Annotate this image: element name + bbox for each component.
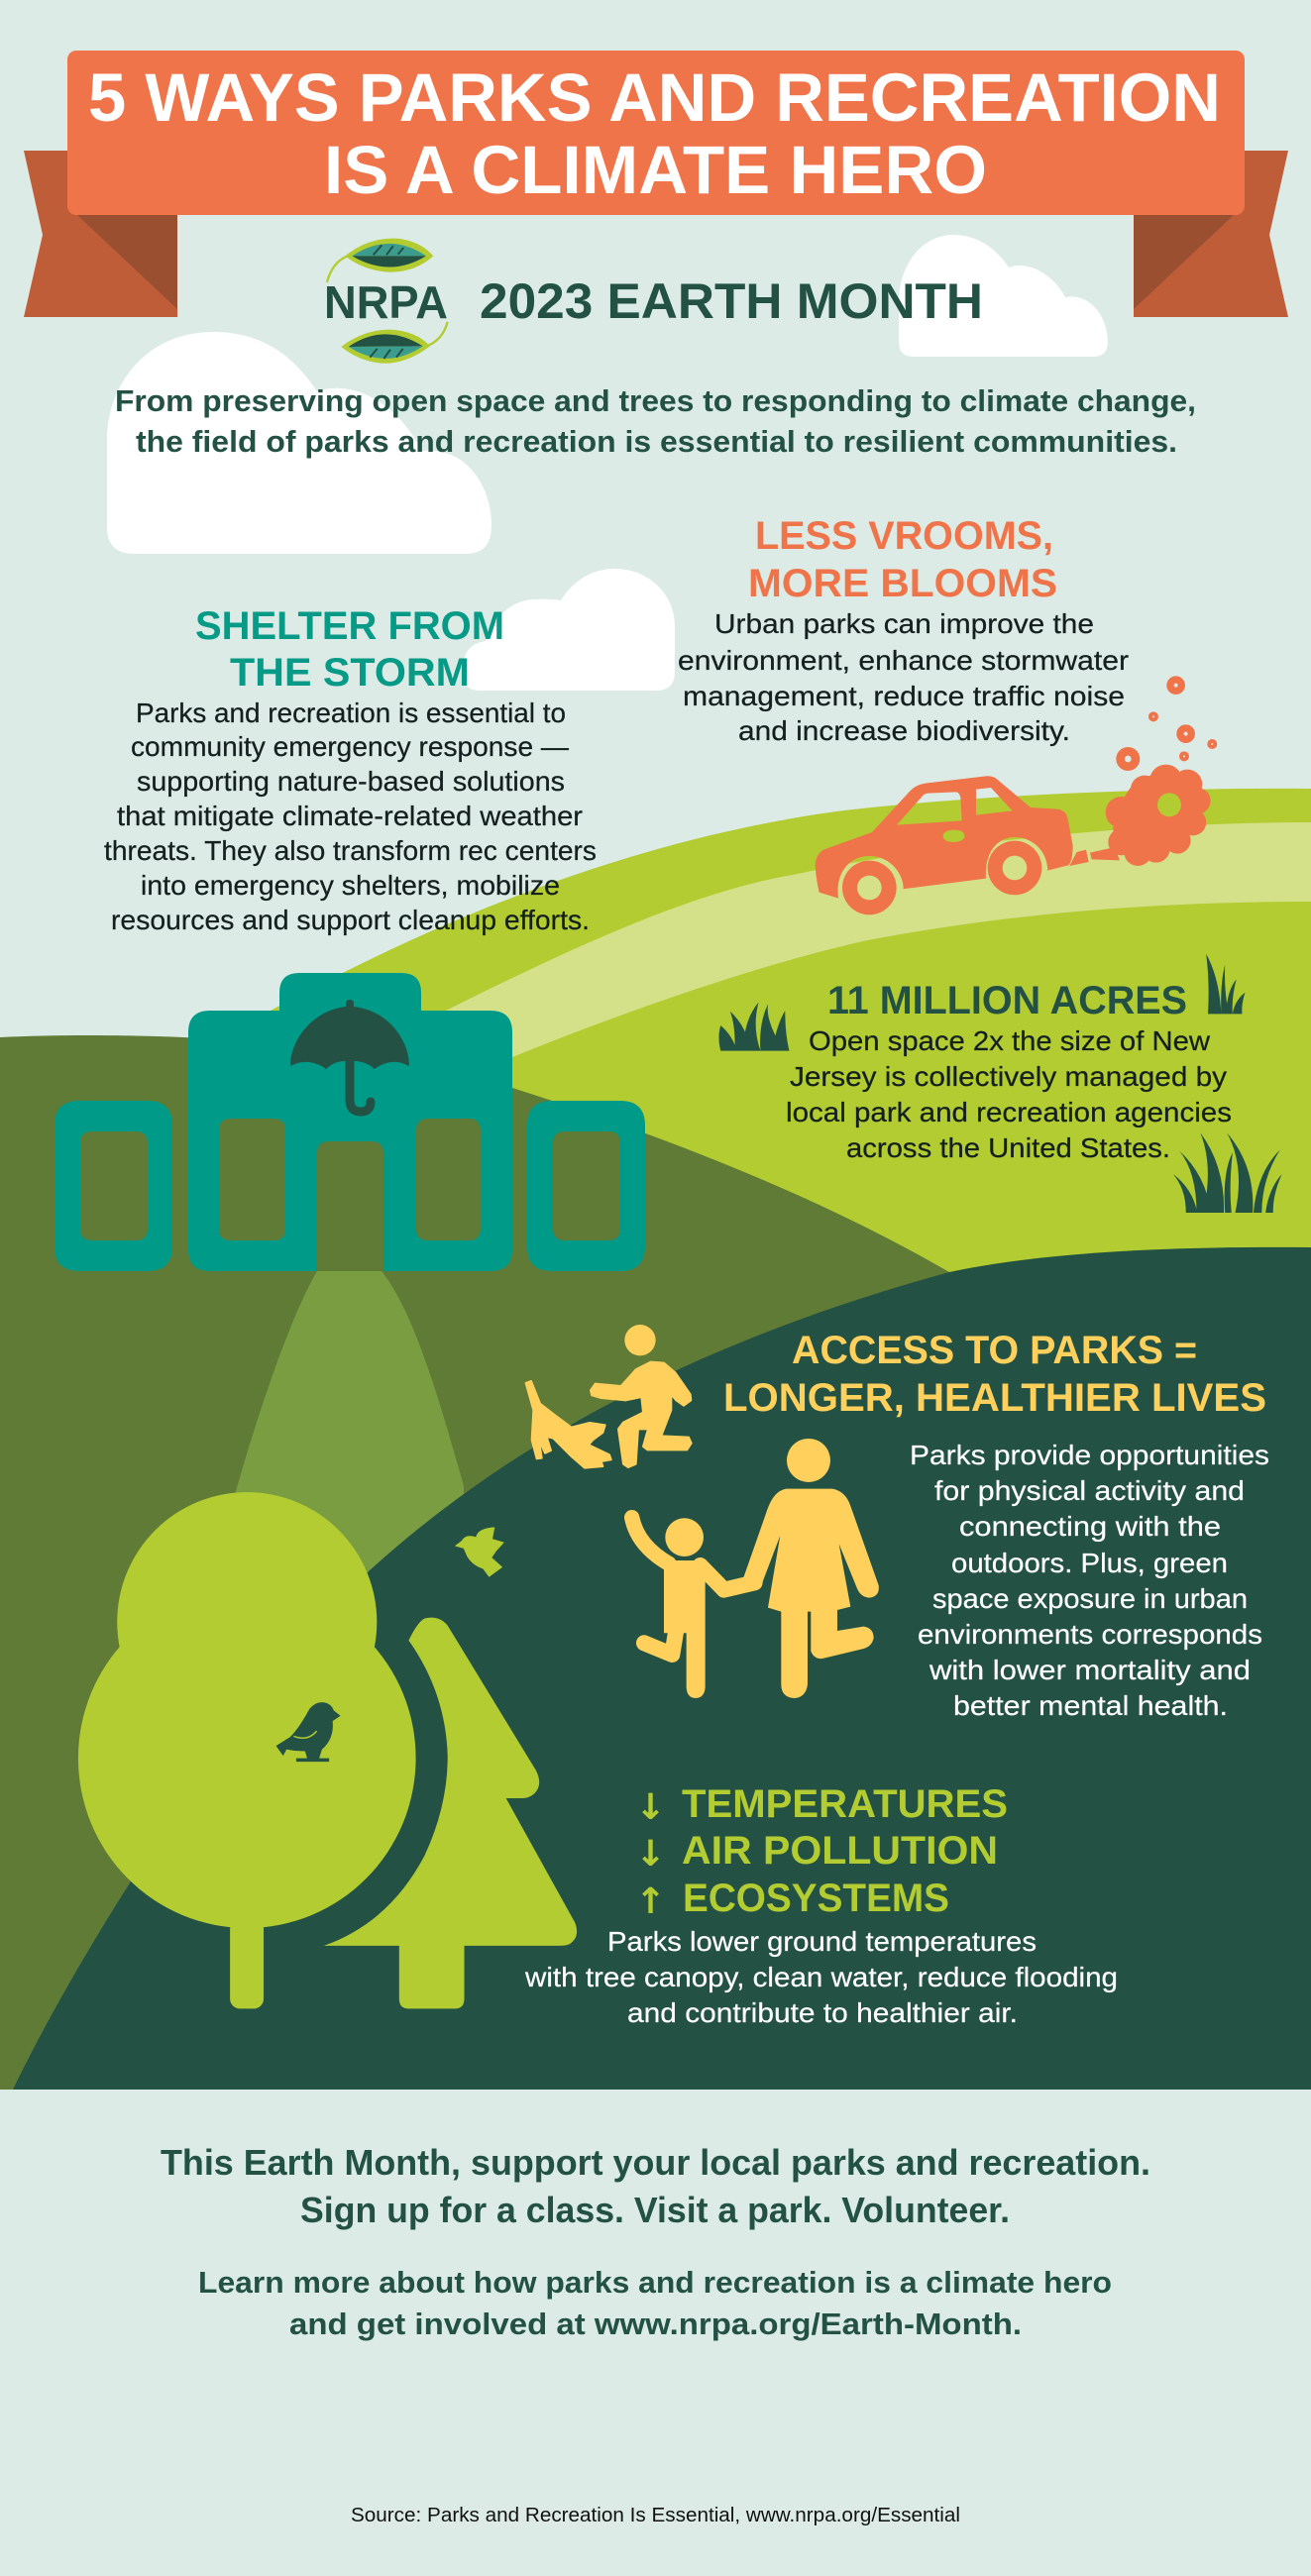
- section: 11 million acres: [718, 954, 1282, 1213]
- body text: and contribute to healthier air.: [627, 1997, 1018, 2028]
- learn more text: [198, 2265, 1112, 2341]
- park path: [198, 1271, 466, 1684]
- ribbon tail: left: [24, 151, 177, 317]
- heading list: TEMPERATURES: [682, 1782, 1008, 1826]
- body text: connecting with the: [959, 1511, 1221, 1542]
- cloud: left: [107, 332, 492, 554]
- icon: adult kneeling: [591, 1325, 692, 1467]
- body text: Parks and recreation is essential to: [136, 698, 566, 728]
- body text: and increase biodiversity.: [738, 715, 1070, 746]
- body text: resources and support cleanup efforts.: [111, 905, 590, 935]
- icon: front wheel: [842, 861, 897, 914]
- footer panel: [0, 2090, 1311, 2576]
- subtitle: 2023 EARTH MONTH: [480, 273, 983, 329]
- trees: [78, 1492, 577, 2008]
- body text: Urban parks can improve the: [714, 608, 1094, 639]
- icon: adult standing: [743, 1439, 879, 1698]
- icon: umbrella: [290, 1000, 409, 1112]
- call to action: [161, 2142, 1150, 2230]
- tree: pine: [324, 1618, 577, 2008]
- section: less vrooms, more blooms: [678, 514, 1129, 746]
- body text: with lower mortality and: [929, 1655, 1251, 1685]
- building wing: right: [527, 1101, 645, 1271]
- learn more text: Learn more about how parks and recreation is a climate hero: [198, 2265, 1112, 2300]
- heading: LONGER, HEALTHIER LIVES: [723, 1376, 1266, 1420]
- body text: local park and recreation agencies: [786, 1097, 1232, 1127]
- building body: [188, 973, 512, 1271]
- icon: grass tuft top right: [1206, 954, 1245, 1014]
- heading list: ↓: [635, 1787, 666, 1828]
- body text: environments corresponds: [918, 1619, 1262, 1650]
- hill: pale road band: [446, 822, 1311, 1090]
- body text: management, reduce traffic noise: [683, 681, 1125, 711]
- body text: Jersey is collectively managed by: [790, 1061, 1227, 1092]
- hill: dark foreground: [13, 1247, 1311, 2090]
- body text: that mitigate climate-related weather: [117, 801, 583, 831]
- body text: Parks lower ground temperatures: [607, 1926, 1037, 1957]
- hill: olive: [0, 1035, 949, 2090]
- body text: [104, 698, 597, 935]
- heading list: ↓: [635, 1834, 666, 1875]
- body text: [524, 1926, 1118, 2028]
- intro text: [115, 383, 1196, 459]
- icon: exhaust cloud: [1069, 765, 1211, 866]
- icon: exhaust flowers: [1121, 680, 1215, 767]
- heading: MORE BLOOMS: [748, 562, 1057, 605]
- cloud: small center: [464, 569, 675, 691]
- section: shelter from the storm: [104, 604, 597, 935]
- icon: rear wheel: [988, 841, 1041, 895]
- body text: Parks provide opportunities: [910, 1440, 1269, 1470]
- call to action: Sign up for a class. Visit a park. Volunteer.: [300, 2190, 1010, 2230]
- ribbon tail: right: [1134, 151, 1288, 317]
- heading: [195, 604, 504, 695]
- body text: space exposure in urban: [932, 1583, 1248, 1614]
- heading list: ECOSYSTEMS: [683, 1877, 949, 1920]
- building wing: left: [55, 1101, 172, 1271]
- body text: supporting nature-based solutions: [137, 766, 565, 797]
- section: access to parks: [723, 1329, 1269, 1721]
- body text: [678, 608, 1129, 746]
- icon: car body: [816, 776, 1073, 899]
- heading: THE STORM: [230, 651, 470, 695]
- icon: child: [632, 1518, 755, 1698]
- shelter building: [55, 973, 645, 1271]
- title text: IS A CLIMATE HERO: [324, 132, 987, 208]
- NRPA logo: [324, 239, 448, 364]
- body text: with tree canopy, clean water, reduce flooding: [524, 1962, 1118, 1992]
- title text: 5 WAYS PARKS AND RECREATION: [88, 59, 1221, 136]
- body text: outdoors. Plus, green: [951, 1548, 1228, 1578]
- icon: dog: [526, 1381, 611, 1468]
- cloud: upper right: [899, 235, 1108, 357]
- body text: Open space 2x the size of New: [809, 1025, 1211, 1056]
- hill: lime: [271, 789, 1311, 1308]
- body text: for physical activity and: [934, 1475, 1245, 1506]
- call to action: This Earth Month, support your local parks and recreation.: [161, 2142, 1150, 2183]
- body text: threats. They also transform rec centers: [104, 835, 597, 866]
- people and dog illustration: [526, 1325, 879, 1698]
- source line: Source: Parks and Recreation Is Essential, www.nrpa.org/Essential: [351, 2505, 960, 2526]
- heading: [723, 1329, 1266, 1420]
- intro text: From preserving open space and trees to responding to climate change,: [115, 383, 1196, 418]
- icon: grass tuft left: [718, 1003, 789, 1051]
- body text: better mental health.: [953, 1690, 1228, 1721]
- icon: top leaf: [327, 239, 433, 282]
- title banner: [24, 51, 1288, 317]
- icon: flying bird: [455, 1527, 504, 1577]
- icon: bottom leaf: [341, 322, 448, 364]
- body text: community emergency response —: [131, 731, 569, 762]
- heading list: [635, 1782, 1008, 1922]
- heading list: ↑: [635, 1881, 666, 1922]
- heading: ACCESS TO PARKS =: [792, 1329, 1197, 1372]
- heading: LESS VROOMS,: [755, 514, 1053, 558]
- learn more text: and get involved at www.nrpa.org/Earth-Month.: [289, 2307, 1022, 2341]
- body text: into emergency shelters, mobilize: [141, 870, 560, 901]
- icon: perched bird: [276, 1702, 341, 1762]
- section: temperatures, air pollution, ecosystems: [524, 1782, 1118, 2028]
- intro text: the field of parks and recreation is essential to resilient communities.: [136, 424, 1177, 459]
- icon: grass tuft bottom right: [1173, 1132, 1282, 1213]
- title text: [88, 59, 1221, 208]
- logo wordmark: NRPA: [324, 276, 448, 328]
- body text: [786, 1025, 1232, 1163]
- heading: SHELTER FROM: [195, 604, 504, 648]
- heading list: AIR POLLUTION: [682, 1829, 998, 1873]
- car with exhaust: [816, 680, 1215, 914]
- heading: [748, 514, 1057, 605]
- banner panel: [67, 51, 1245, 215]
- heading: 11 MILLION ACRES: [827, 979, 1187, 1022]
- body text: [910, 1440, 1269, 1721]
- tree: round: [78, 1492, 416, 2008]
- body text: across the United States.: [846, 1132, 1170, 1163]
- body text: environment, enhance stormwater: [678, 645, 1129, 676]
